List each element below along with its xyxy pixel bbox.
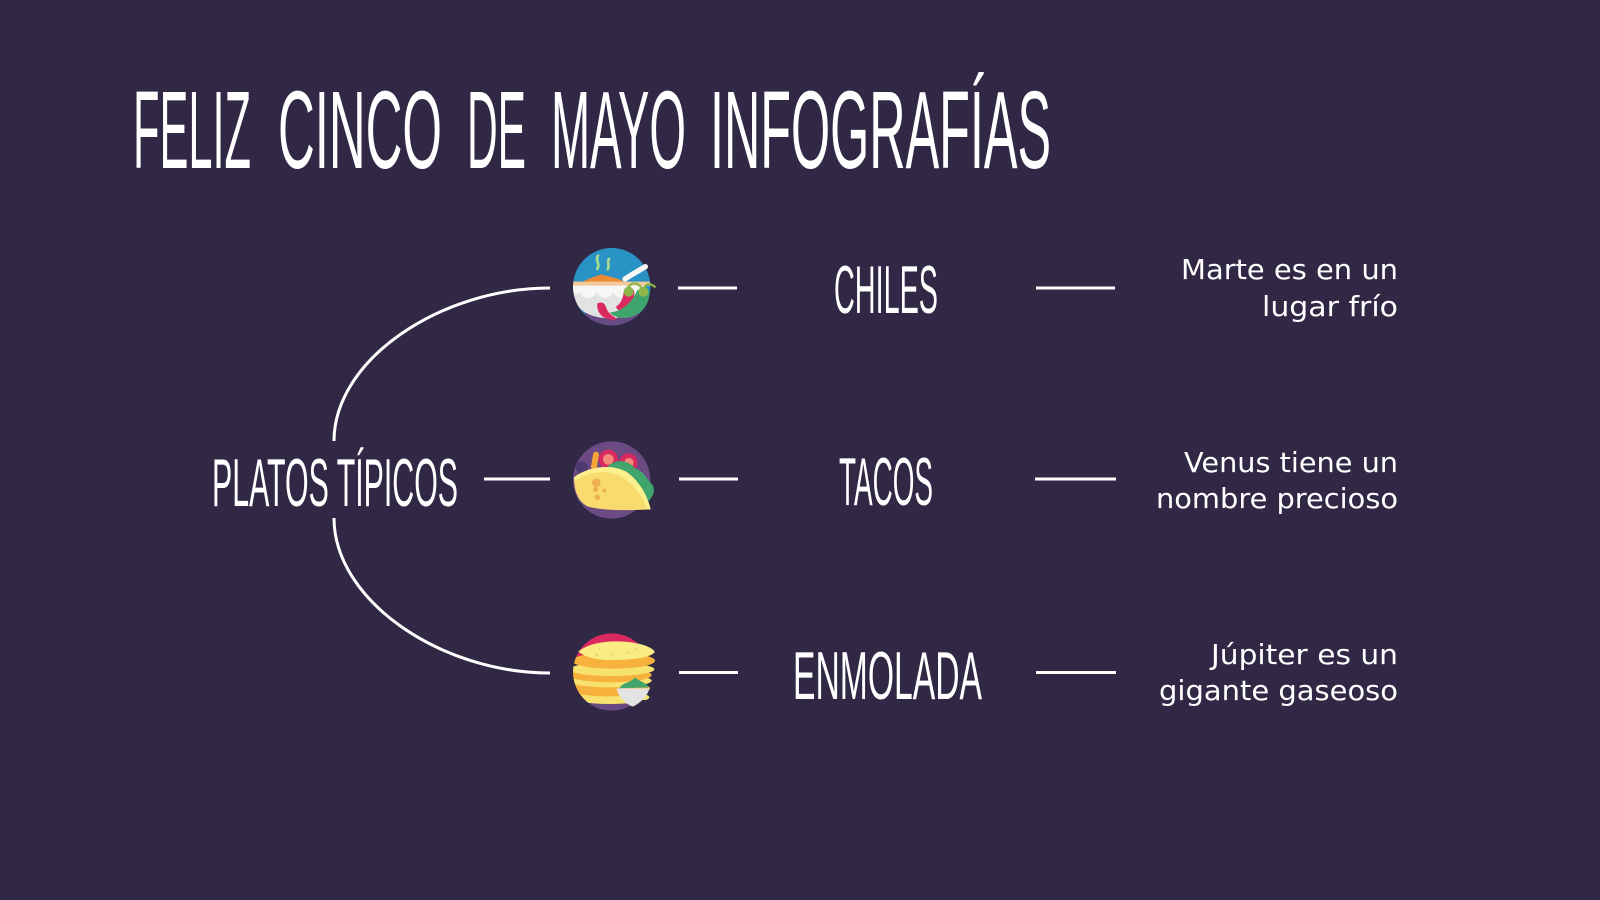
description: Venus: Venus tiene un [1184,446,1398,479]
diagram: connectors [334,288,1116,673]
connector: lower arc [334,518,550,673]
spoon [625,267,645,279]
connector: upper arc [334,288,550,441]
connector: chiles icon to label [678,286,737,290]
description: Venus: nombre precioso [1156,482,1398,515]
title: DE [467,69,526,192]
connector: enmolada label to text [1036,671,1116,674]
text: TACOS [839,444,933,520]
text: CHILES [834,252,938,328]
description: Venus [1156,446,1398,515]
green chile [610,290,649,318]
icon: taco [570,440,654,523]
description: Marte: lugar frío [1262,290,1398,323]
steam [597,256,609,269]
connector: taco icon to label [679,478,738,480]
description: Júpiter: gigante gaseoso [1159,674,1398,707]
description: Júpiter [1159,638,1398,707]
connector: tacos label to text [1035,478,1116,480]
connector: center to taco [484,478,550,480]
text: ENMOLADA [793,638,982,714]
text: INFOGRAFÍAS [710,69,1051,192]
description: Júpiter: Júpiter es un [1209,638,1398,671]
description: Marte: Marte es en un [1181,253,1398,286]
title: CINCO [278,69,442,192]
title [133,69,1051,192]
text: PLATOS TÍPICOS [212,445,458,521]
title: FELIZ [133,69,251,192]
icon: bowl with chiles [573,248,656,326]
connector: enmolada icon to label [679,671,738,674]
icon: stacked enmoladas [573,633,656,711]
title: MAYO [551,69,686,192]
description: Marte [1181,253,1398,323]
connector: chiles label to text [1036,286,1115,290]
red chiles [597,302,617,320]
